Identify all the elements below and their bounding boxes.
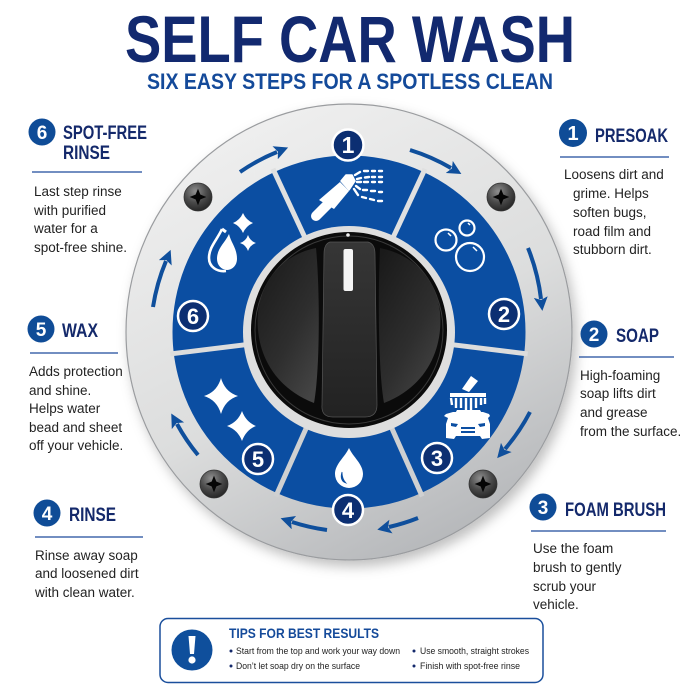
panel: step 3 foam brush: 3 — [538, 498, 548, 519]
panel: step 1 presoak: road film and — [573, 224, 651, 239]
badge 1: 1 — [342, 132, 355, 158]
tips list: Use smooth, straight strokes — [420, 645, 529, 656]
title: SELF CAR WASH — [125, 2, 575, 76]
panel: step 2 soap: 2 — [589, 325, 599, 346]
panel: step 5 wax: 5 — [36, 320, 47, 341]
panel: step 6 spot-free rinse: SPOT-FREE — [63, 123, 147, 144]
panel: step 5 wax: WAX — [62, 321, 98, 342]
panel: step 2 soap: High-foaming — [580, 368, 660, 383]
panel: step 6 spot-free rinse — [28, 118, 147, 255]
panel: step 1 presoak: Loosens dirt and — [564, 167, 664, 182]
panel: step 5 wax: bead and sheet — [29, 420, 122, 435]
tips list — [230, 645, 529, 671]
badge 3 — [422, 443, 452, 473]
badge 5: 5 — [252, 447, 264, 472]
panel: step 6 spot-free rinse: RINSE — [63, 143, 110, 164]
badge 5 — [243, 444, 273, 474]
panel: step 2 soap: soap lifts dirt — [580, 386, 656, 401]
panel: step 6 spot-free rinse: with purified — [33, 203, 106, 218]
panel: step 2 soap — [579, 320, 681, 439]
badge 2 — [489, 299, 519, 329]
panel: step 3 foam brush: Use the foam — [533, 541, 613, 556]
blue segmented ring — [170, 169, 528, 496]
panel: step 4 rinse: RINSE — [69, 505, 116, 526]
tips list: Don’t let soap dry on the surface — [236, 660, 360, 671]
panel: step 1 presoak: PRESOAK — [595, 126, 668, 147]
badge 2: 2 — [498, 302, 510, 327]
panel: step 4 rinse: 4 — [42, 504, 53, 525]
panel: step 2 soap: from the surface. — [580, 424, 681, 439]
badge 4: 4 — [342, 498, 355, 523]
panel: step 5 wax — [28, 316, 123, 453]
tips list: Start from the top and work your way down — [236, 645, 400, 656]
panel: step 5 wax: and shine. — [29, 383, 91, 398]
panel: step 1 presoak: soften bugs, — [573, 205, 647, 220]
panel: step 1 presoak: stubborn dirt. — [573, 242, 652, 257]
panel: step 5 wax: Adds protection — [29, 364, 123, 379]
tips list: Finish with spot-free rinse — [420, 660, 520, 671]
icon: exclamation — [172, 630, 212, 670]
panel: step 2 soap: and grease — [580, 405, 648, 420]
panel: step 3 foam brush: FOAM BRUSH — [565, 500, 666, 521]
screw bottom right — [469, 470, 497, 498]
screw bottom left — [200, 470, 228, 498]
panel: step 5 wax: off your vehicle. — [29, 438, 123, 453]
badge 1 — [332, 130, 364, 160]
icon: drop with sparkles — [209, 213, 256, 271]
panel: step 1 presoak: 1 — [567, 123, 579, 145]
panel: dial plate — [126, 104, 572, 560]
panel: step 3 foam brush: vehicle. — [533, 597, 579, 612]
direction arrows — [153, 150, 541, 530]
panel: step 3 foam brush: scrub your — [533, 579, 597, 594]
icon: car with foam brush — [444, 376, 490, 439]
panel: step 6 spot-free rinse: spot-free shine. — [34, 240, 127, 255]
panel: step 6 spot-free rinse: 6 — [37, 123, 47, 144]
panel: step 4 rinse: and loosened dirt — [35, 566, 139, 581]
panel: tips for best results — [160, 618, 543, 682]
icon: bubbles — [436, 220, 484, 271]
panel: step 3 foam brush — [530, 494, 666, 612]
panel: step 1 presoak: grime. Helps — [573, 186, 649, 201]
metal plate — [126, 104, 572, 560]
badge 6 — [178, 301, 208, 331]
panel: step 6 spot-free rinse: water for a — [33, 221, 98, 236]
panel: step 4 rinse: with clean water. — [34, 585, 135, 600]
badge 4 — [333, 495, 363, 525]
panel: step 2 soap: SOAP — [616, 326, 659, 347]
screw top left — [184, 183, 212, 211]
panel: step 3 foam brush: brush to gently — [533, 560, 622, 575]
panel: step 1 presoak — [559, 119, 669, 257]
icon: spray nozzle — [316, 171, 382, 216]
panel: step 4 rinse — [34, 500, 143, 600]
badge 6: 6 — [187, 304, 199, 329]
panel: step 5 wax: Helps water — [29, 401, 101, 416]
selector knob — [251, 232, 447, 428]
icon: wax sparkles — [204, 378, 256, 441]
badge 3: 3 — [431, 446, 443, 471]
screw top right — [487, 183, 515, 211]
tips heading: TIPS FOR BEST RESULTS — [229, 625, 379, 641]
panel: step 4 rinse: Rinse away soap — [35, 548, 138, 563]
subtitle: SIX EASY STEPS FOR A SPOTLESS CLEAN — [147, 69, 553, 94]
icon: water drop — [335, 448, 363, 488]
panel: step 6 spot-free rinse: Last step rinse — [34, 184, 122, 199]
